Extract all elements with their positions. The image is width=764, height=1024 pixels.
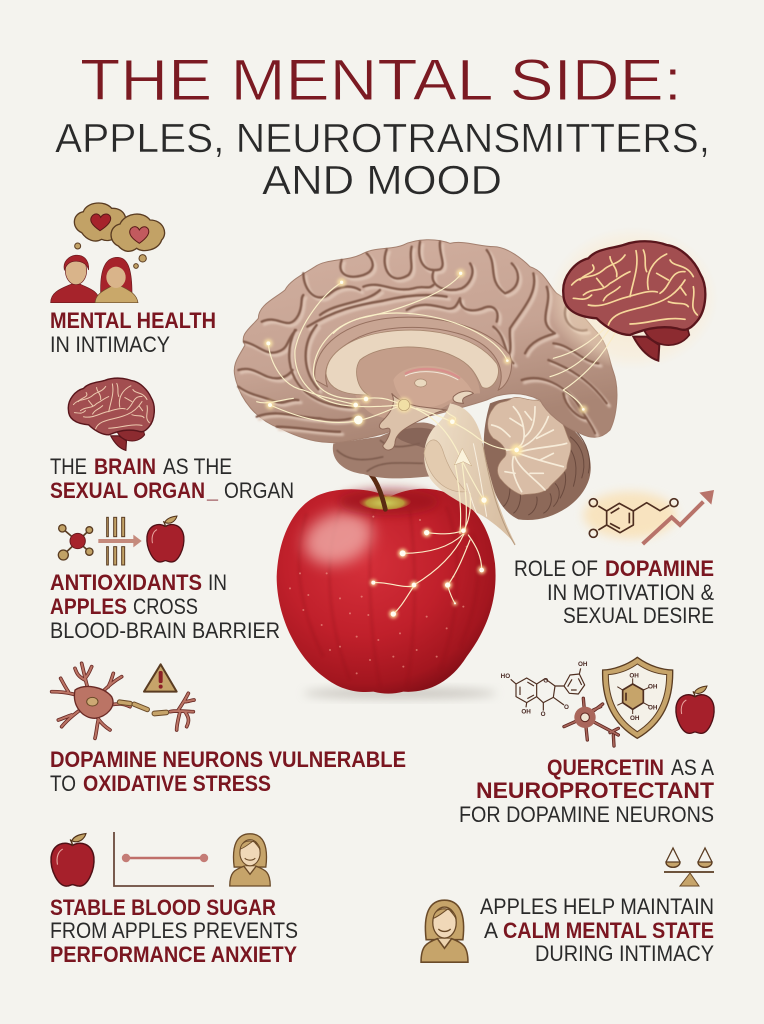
corpus callosum <box>326 330 498 395</box>
apple dimple shade <box>338 488 438 515</box>
icon: quercetin molecule, neuron, shield and apple: OH <box>648 683 658 690</box>
panel: role of dopamine <box>514 490 714 628</box>
text block: A <box>484 918 498 943</box>
icon: quercetin molecule, neuron, shield and apple: O <box>541 711 546 718</box>
text block: AS A <box>671 755 714 780</box>
text block: NEUROPROTECTANT <box>476 778 715 803</box>
subheading: IN INTIMACY <box>50 332 170 357</box>
text block: FOR DOPAMINE NEURONS <box>459 802 714 827</box>
text block: STABLE BLOOD SUGAR <box>50 895 276 920</box>
text block <box>50 454 294 503</box>
brainstem <box>424 391 516 545</box>
icon: quercetin molecule, neuron, shield and apple: O <box>564 704 569 711</box>
icon: brain <box>68 378 154 450</box>
icon: quercetin molecule, neuron, shield and apple: OH <box>630 715 640 722</box>
text block: CROSS <box>133 594 198 619</box>
icon: quercetin molecule, neuron, shield and apple: OH <box>629 672 639 679</box>
pathway glow nodes <box>264 269 587 504</box>
text block: THE <box>50 454 87 479</box>
title: AND MOOD <box>262 157 502 203</box>
apple striations <box>299 507 478 687</box>
icon: neuron with warning <box>52 663 194 738</box>
text block: FROM APPLES PREVENTS <box>50 918 298 943</box>
panel: antioxidants <box>50 516 280 643</box>
text block: TO <box>50 771 76 796</box>
heading: MENTAL HEALTH <box>50 308 216 333</box>
text block: PERFORMANCE ANXIETY <box>50 942 297 967</box>
icon: balance scale <box>664 848 714 886</box>
panel: quercetin <box>459 657 715 827</box>
panel: dopamine neurons <box>50 663 406 796</box>
text block: ANTIOXIDANTS <box>50 570 202 595</box>
icon: couple with thought bubbles <box>51 203 165 303</box>
apple glow nodes <box>370 497 487 618</box>
icon: dopamine molecule and rising arrow <box>583 490 714 544</box>
hypothalamus <box>379 393 447 450</box>
panel: calm mental state <box>421 848 714 966</box>
text block: BLOOD-BRAIN BARRIER <box>50 618 280 643</box>
icon: quercetin molecule, neuron, shield and apple: OH <box>648 704 658 711</box>
text block: SEXUAL ORGAN <box>50 478 205 503</box>
text block: BRAIN <box>94 454 156 479</box>
cerebrum <box>234 240 617 443</box>
cingulate band <box>315 317 512 390</box>
text block <box>50 895 298 967</box>
icon: flat blood sugar chart <box>114 832 214 886</box>
text block: APPLES HELP MAINTAIN <box>480 894 714 919</box>
panel: brain as the sexual organ <box>50 378 294 503</box>
icon: quercetin molecule, neuron, shield and apple <box>501 657 714 746</box>
text block <box>480 894 714 966</box>
upward arrow in brainstem <box>454 448 472 466</box>
panel: mental health in intimacy <box>50 203 216 357</box>
text block: APPLES <box>50 594 127 619</box>
temporal lower lobe <box>333 423 437 478</box>
apple shadow <box>303 688 497 699</box>
text block <box>50 747 406 796</box>
icon: antioxidants crossing barrier <box>58 516 184 565</box>
text block: SEXUAL DESIRE <box>563 603 714 628</box>
cerebrum folds <box>238 242 609 436</box>
glowing neural pathways <box>257 273 617 533</box>
title: APPLES, NEUROTRANSMITTERS, <box>55 115 710 161</box>
inner midline tissue <box>350 347 480 419</box>
icon: apple <box>51 834 94 886</box>
apple dimple <box>359 493 411 510</box>
thalamus and fornix <box>393 366 473 407</box>
text block <box>514 556 714 628</box>
panel: stable blood sugar <box>50 832 298 967</box>
text block <box>50 570 280 643</box>
icon: glowing brain top right <box>548 227 718 370</box>
icon: quercetin molecule, neuron, shield and apple: O <box>543 678 548 685</box>
central illustration: brain anatomy <box>234 240 617 545</box>
apple stem <box>369 472 385 509</box>
title <box>55 48 710 203</box>
icon: quercetin molecule, neuron, shield and apple: OH <box>521 708 531 715</box>
apple highlight <box>297 504 379 573</box>
text block: DOPAMINE NEURONS VULNERABLE <box>50 747 406 772</box>
text block: DURING INTIMACY <box>535 941 714 966</box>
icon: smiling woman <box>230 834 270 886</box>
text block: CALM MENTAL STATE <box>503 918 714 943</box>
apple speckles <box>289 516 468 674</box>
cerebellum <box>484 397 591 520</box>
text block: _ <box>206 478 219 503</box>
text block: IN <box>208 570 227 595</box>
text block: OXIDATIVE STRESS <box>83 771 271 796</box>
text block: AS THE <box>163 454 232 479</box>
text block: IN MOTIVATION & <box>547 580 714 605</box>
text block: ROLE OF <box>514 556 598 581</box>
text block: ORGAN <box>224 478 294 503</box>
text block: QUERCETIN <box>547 755 664 780</box>
icon: quercetin molecule, neuron, shield and apple: OH <box>578 661 588 668</box>
text block: DOPAMINE <box>605 556 714 581</box>
apple body <box>277 489 496 694</box>
central illustration: apple <box>277 472 497 699</box>
title: THE MENTAL SIDE: <box>80 48 682 113</box>
icon: calm woman <box>421 900 468 962</box>
neural pathways in apple <box>370 493 487 618</box>
icon: quercetin molecule, neuron, shield and apple: HO <box>501 673 510 680</box>
text block <box>459 755 715 827</box>
